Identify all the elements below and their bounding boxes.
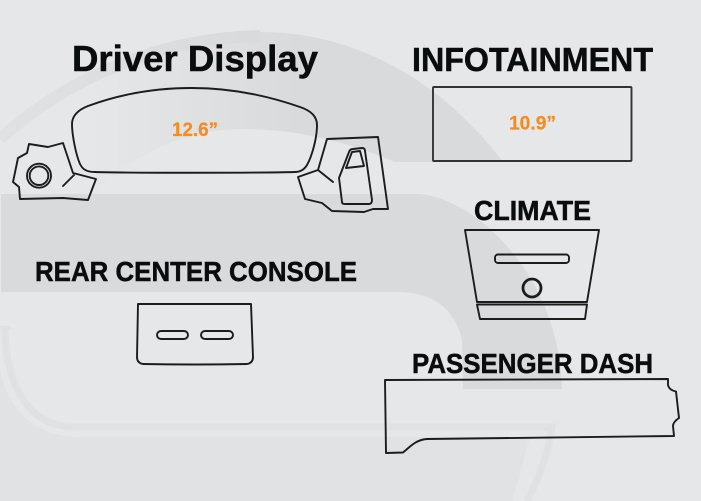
heading: Climate: CLIMATE (474, 195, 591, 226)
left steering pod (13, 143, 96, 200)
size label: 12.6 inch: 12.6” (172, 120, 218, 141)
heading: Passenger Dash: PASSENGER DASH (412, 348, 653, 379)
infotainment screen outline (433, 87, 632, 161)
heading: Driver Display: Driver Display (72, 38, 318, 79)
heading: Infotainment: INFOTAINMENT (412, 41, 653, 78)
size label: 10.9 inch: 10.9” (509, 114, 556, 134)
rear center console outline (137, 304, 253, 364)
heading: Rear Center Console: REAR CENTER CONSOLE (35, 256, 357, 287)
passenger dash outline (385, 379, 679, 453)
climate panel outline (465, 230, 599, 319)
right steering pod (298, 137, 388, 212)
driver display cluster outline (72, 88, 317, 173)
